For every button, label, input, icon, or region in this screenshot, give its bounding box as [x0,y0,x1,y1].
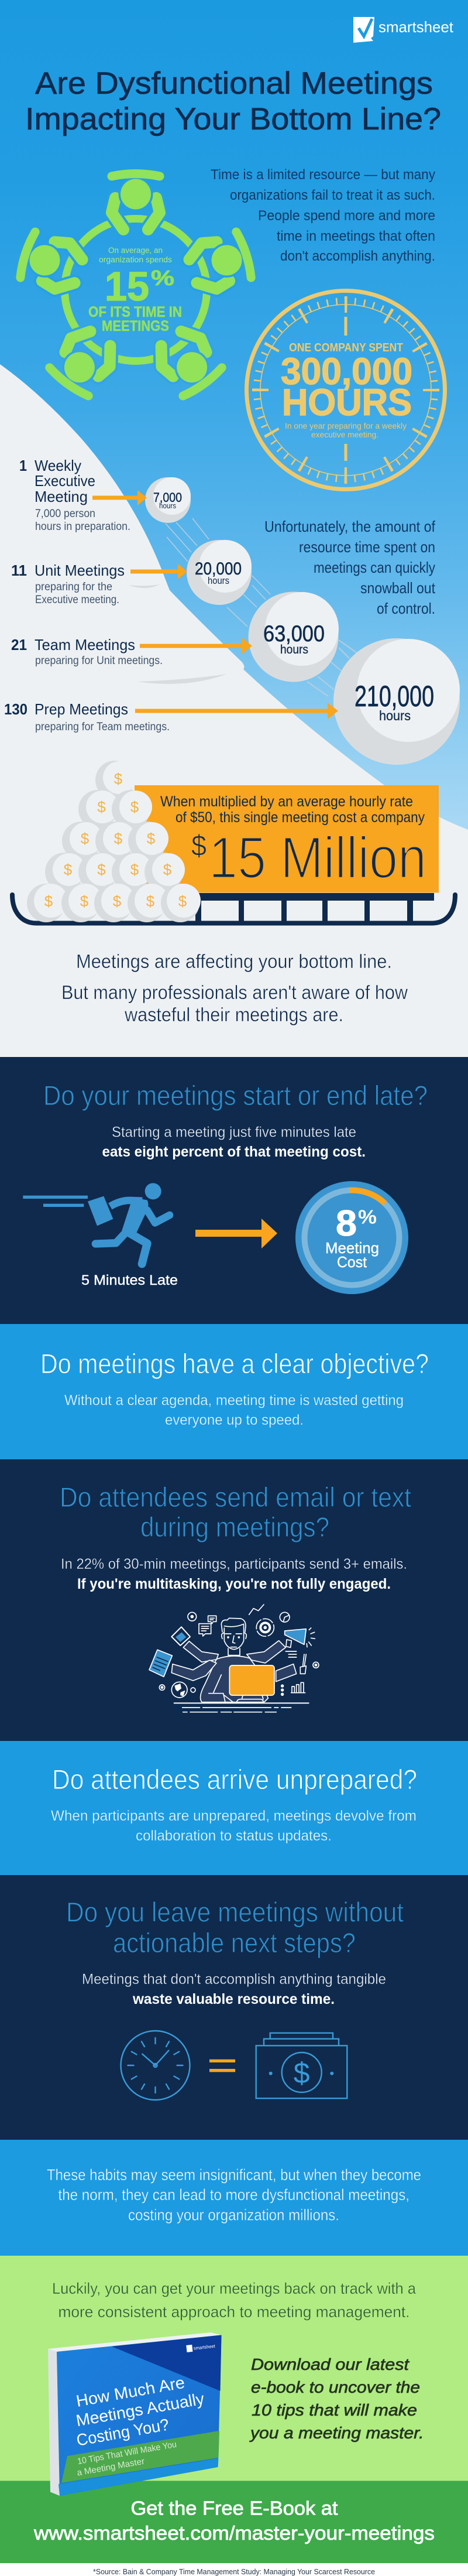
promo text: Luckily, you can get your meetings back on track with a [52,2280,417,2297]
chart: 8 percent meeting cost ring: % [358,1206,377,1227]
e-book cover [48,2332,221,2496]
callout: $15 million orange box: 15 Million [209,825,426,891]
callout: $15 million orange box [135,785,439,892]
title: Are Dysfunctional Meetings [35,66,433,101]
snowball explanation text [264,518,436,617]
arrow [195,1219,277,1248]
panel: no next steps [0,1875,468,2140]
snowball 1: 7,000 hours: hours [159,501,176,510]
body text: When participants are unprepared, meetings devolve from [51,1808,417,1824]
body text: If you're multitasking, you're not fully engaged. [77,1576,391,1592]
panel: habits summary: the norm, they can lead to more dysfunctional meetings, [58,2186,410,2204]
download text: 10 tips that will make [252,2401,417,2419]
body text: In 22% of 30-min meetings, participants send 3+ emails. [61,1556,407,1572]
coin row 4: $ [97,861,106,878]
snowball explanation text: snowball out [360,579,436,597]
snowball 3: 63,000 hours: hours [280,643,308,656]
heading: Do you leave meetings without [66,1896,404,1928]
coin row 5 [27,884,201,922]
source footnote: *Source: Bain & Company Time Management Study: Managing Your Scarcest Resource [93,2568,375,2576]
intro text block [211,167,435,264]
sled bed and slats [193,893,434,923]
list item: 21 team meetings: preparing for Unit meetings. [35,655,163,667]
list item: 1 weekly executive meeting: 7,000 person [35,508,95,520]
body text: Starting a meeting just five minutes late [112,1124,356,1141]
logo wordmark: smartsheet [378,18,454,36]
15 percent statistic text: On average, an [108,246,163,255]
callout: $15 million orange box: When multiplied by an average hourly rate [160,793,413,810]
chart: meeting table with five people, 15 percent [18,174,253,398]
coin row 2: $ [97,798,106,816]
list item: 130 prep meetings: 130 [4,700,27,718]
book title: Meetings Actually [74,2389,205,2430]
body text: Without a clear agenda, meeting time is wasted getting [64,1393,404,1409]
snowball 2: 20,000 hours: hours [208,575,229,586]
panel: call to action band: Get the Free E-Book at [131,2497,338,2519]
clock text: HOURS [282,381,412,423]
coin row 5: $ [44,892,53,910]
heading: during meetings? [140,1511,329,1542]
title [25,66,441,136]
sled [12,893,455,923]
15 percent statistic text [88,246,182,334]
icon: stack of money [256,2033,347,2098]
intro text block: time in meetings that often [277,228,435,244]
list item: 1 weekly executive meeting: Weekly [35,457,81,474]
intro text block: organizations fail to treat it as such. [230,187,435,203]
snowball explanation text: meetings can quickly [314,559,435,576]
coin row 3: $ [81,830,90,847]
coin row 3: $ [114,830,123,847]
table ring [64,219,207,361]
heading: Do attendees send email or text [60,1482,411,1513]
body text [82,1971,386,2007]
intro text block: don't accomplish anything. [280,248,435,264]
download text [249,2355,424,2442]
coin row 4: $ [130,861,139,878]
bottom line text block: But many professionals aren't aware of how [61,981,408,1003]
person 4 [48,324,120,398]
15 percent statistic text: organization spends [99,255,172,264]
list item: 1 weekly executive meeting: 1 [19,457,27,474]
book title: 10 Tips That Will Make You [77,2440,177,2466]
intro text block: Time is a limited resource — but many [211,167,435,183]
person 2 [18,231,86,294]
list item: 130 prep meetings [4,700,170,733]
list item: 11 unit meetings: 11 [11,562,27,579]
body text: waste valuable resource time. [132,1991,335,2007]
panel: clear objective [0,1324,468,1459]
snowball 4: 210,000 hours [333,638,460,765]
bottom line text block: Meetings are affecting your bottom line. [76,950,392,972]
icon: equals sign [209,2060,235,2072]
person 3 [185,231,253,294]
snowball 2: 20,000 hours [187,540,252,605]
list item: 11 unit meetings: Unit Meetings [35,562,125,579]
clock text [281,341,412,439]
icon: running late person [23,1183,170,1264]
book spine [48,2349,60,2496]
panel: call to action band: www.smartsheet.com/master-your-meetings [33,2522,435,2544]
coin row 2: $ [130,798,139,816]
person 1 [112,174,160,230]
clock text: 300,000 [281,350,412,392]
snowball explanation text: of control. [377,600,435,617]
download text: Download our latest [251,2355,410,2373]
15 percent statistic text: MEETINGS [102,318,169,334]
list item: 130 prep meetings: Prep Meetings [35,700,128,718]
coin row 1 [95,761,136,799]
book title: How Much Are [75,2373,186,2410]
chart: 8 percent meeting cost ring: Meeting [325,1239,379,1257]
snowball explanation text: resource time spent on [299,538,435,556]
bottom line text block [61,950,408,1025]
panel: email or text during meetings [0,1459,468,1741]
list item: 1 weekly executive meeting: hours in preparation. [35,521,130,533]
coin row 5: $ [113,892,122,910]
panel: hero background sky [0,0,468,1057]
book cover [57,2335,221,2496]
snowball explanation text: Unfortunately, the amount of [264,518,436,535]
coin row 4: $ [64,861,73,878]
panel: habits summary: costing your organization millions. [128,2206,339,2224]
clock text: executive meeting. [311,430,378,439]
list item: 1 weekly executive meeting: Meeting [35,488,88,505]
logo: smartsheet [353,17,454,43]
list item: 21 team meetings: 21 [11,636,27,654]
body text: eats eight percent of that meeting cost. [102,1144,366,1160]
chart: 8 percent meeting cost ring [295,1181,408,1294]
book logo: smartsheet [193,2344,216,2351]
clock text: In one year preparing for a weekly [285,421,407,430]
download text: you a meeting master. [249,2424,424,2442]
snow hill [0,364,468,1057]
arrow: team meetings [140,638,252,654]
promo text: more consistent approach to meeting management. [58,2303,410,2321]
arrow: unit meetings [130,564,187,579]
coin row 3 [62,822,168,860]
heading: Do your meetings start or end late? [43,1080,428,1111]
arrow: weekly meeting [92,490,147,505]
list item: 1 weekly executive meeting: Executive [35,472,95,490]
snowball 1: 7,000 hours: 7,000 [153,490,182,505]
book logo [186,2342,216,2352]
download text: e-book to uncover the [251,2378,420,2396]
title: Impacting Your Bottom Line? [25,102,441,136]
coin row 3: $ [147,830,156,847]
snow dents [128,584,227,684]
panel: habits summary: These habits may seem insignificant, but when they become [47,2166,421,2184]
snowball 1: 7,000 hours [145,477,191,523]
coin row 5: $ [178,892,187,910]
heading [60,1482,411,1542]
snowball 4: 210,000 hours: hours [379,708,411,723]
label: 5 minutes late: 5 Minutes Late [81,1272,178,1288]
body text: collaboration to status updates. [136,1828,332,1844]
promo text [52,2280,417,2321]
callout: $15 million orange box: of $50, this single meeting cost a company [176,809,425,826]
snowball 4: 210,000 hours: 210,000 [355,680,434,713]
person 5 [152,324,223,398]
intro text block: People spend more and more [258,208,435,224]
book pages [48,2332,221,2352]
list item: 130 prep meetings: preparing for Team meetings. [35,721,170,733]
body text [51,1808,417,1844]
list item: 21 team meetings [11,636,163,667]
body text [61,1556,407,1592]
heading [66,1896,404,1958]
icon: logo flag with check [353,17,374,43]
list item: 11 unit meetings: preparing for the [35,581,112,593]
coin row 5: $ [80,892,89,910]
book title: Costing You? [75,2416,170,2450]
panel: start or end late [0,1057,468,1324]
icon: multitasking worker [149,1605,319,1712]
speed lines behind snowballs [166,518,357,696]
book title [63,2370,214,2478]
arrow: prep meetings [135,703,338,719]
book title: a Meeting Master [76,2457,145,2478]
15 percent statistic text: OF ITS TIME IN [88,304,182,320]
clock face and ticks [247,290,445,490]
chart: 8 percent meeting cost ring: Cost [337,1253,367,1271]
heading: Do attendees arrive unprepared? [52,1764,417,1795]
coin row 1: $ [114,770,123,788]
15 percent statistic text: % [151,266,174,290]
coin row 2 [78,790,152,829]
body text [64,1393,404,1428]
chart: 8 percent meeting cost ring: 8 [336,1203,357,1244]
15 percent statistic text: 15 [105,264,149,309]
list item: 11 unit meetings [11,562,125,606]
icon: clock [121,2031,190,2100]
panel: e-book promo [0,2256,468,2481]
coin row 5: $ [146,892,155,910]
panel: call to action band [0,2481,468,2563]
list item: 21 team meetings: Team Meetings [35,636,135,654]
panel: arrive unprepared [0,1741,468,1875]
body text [102,1124,366,1160]
snowball 2: 20,000 hours: 20,000 [195,559,242,579]
bottom line text block: wasteful their meetings are. [124,1004,343,1025]
snowball 3: 63,000 hours [248,591,339,682]
icon: stack of money: $ [294,2057,310,2089]
chart: clock with 300,000 hours [247,290,445,490]
coin row 4: $ [163,861,172,878]
list item: 1 weekly executive meeting [19,457,130,533]
heading: actionable next steps? [113,1927,356,1958]
snowball 3: 63,000 hours: 63,000 [263,621,325,646]
list item: 11 unit meetings: Executive meeting. [35,594,119,606]
sled rail [12,895,455,923]
clock text: ONE COMPANY SPENT [289,341,403,354]
body text: everyone up to speed. [165,1412,304,1428]
coin row 4 [45,853,185,891]
panel: habits summary [0,2140,468,2256]
body text: Meetings that don't accomplish anything tangible [82,1971,386,1987]
coin pile [27,761,201,922]
callout: $15 million orange box: $ [191,829,207,862]
